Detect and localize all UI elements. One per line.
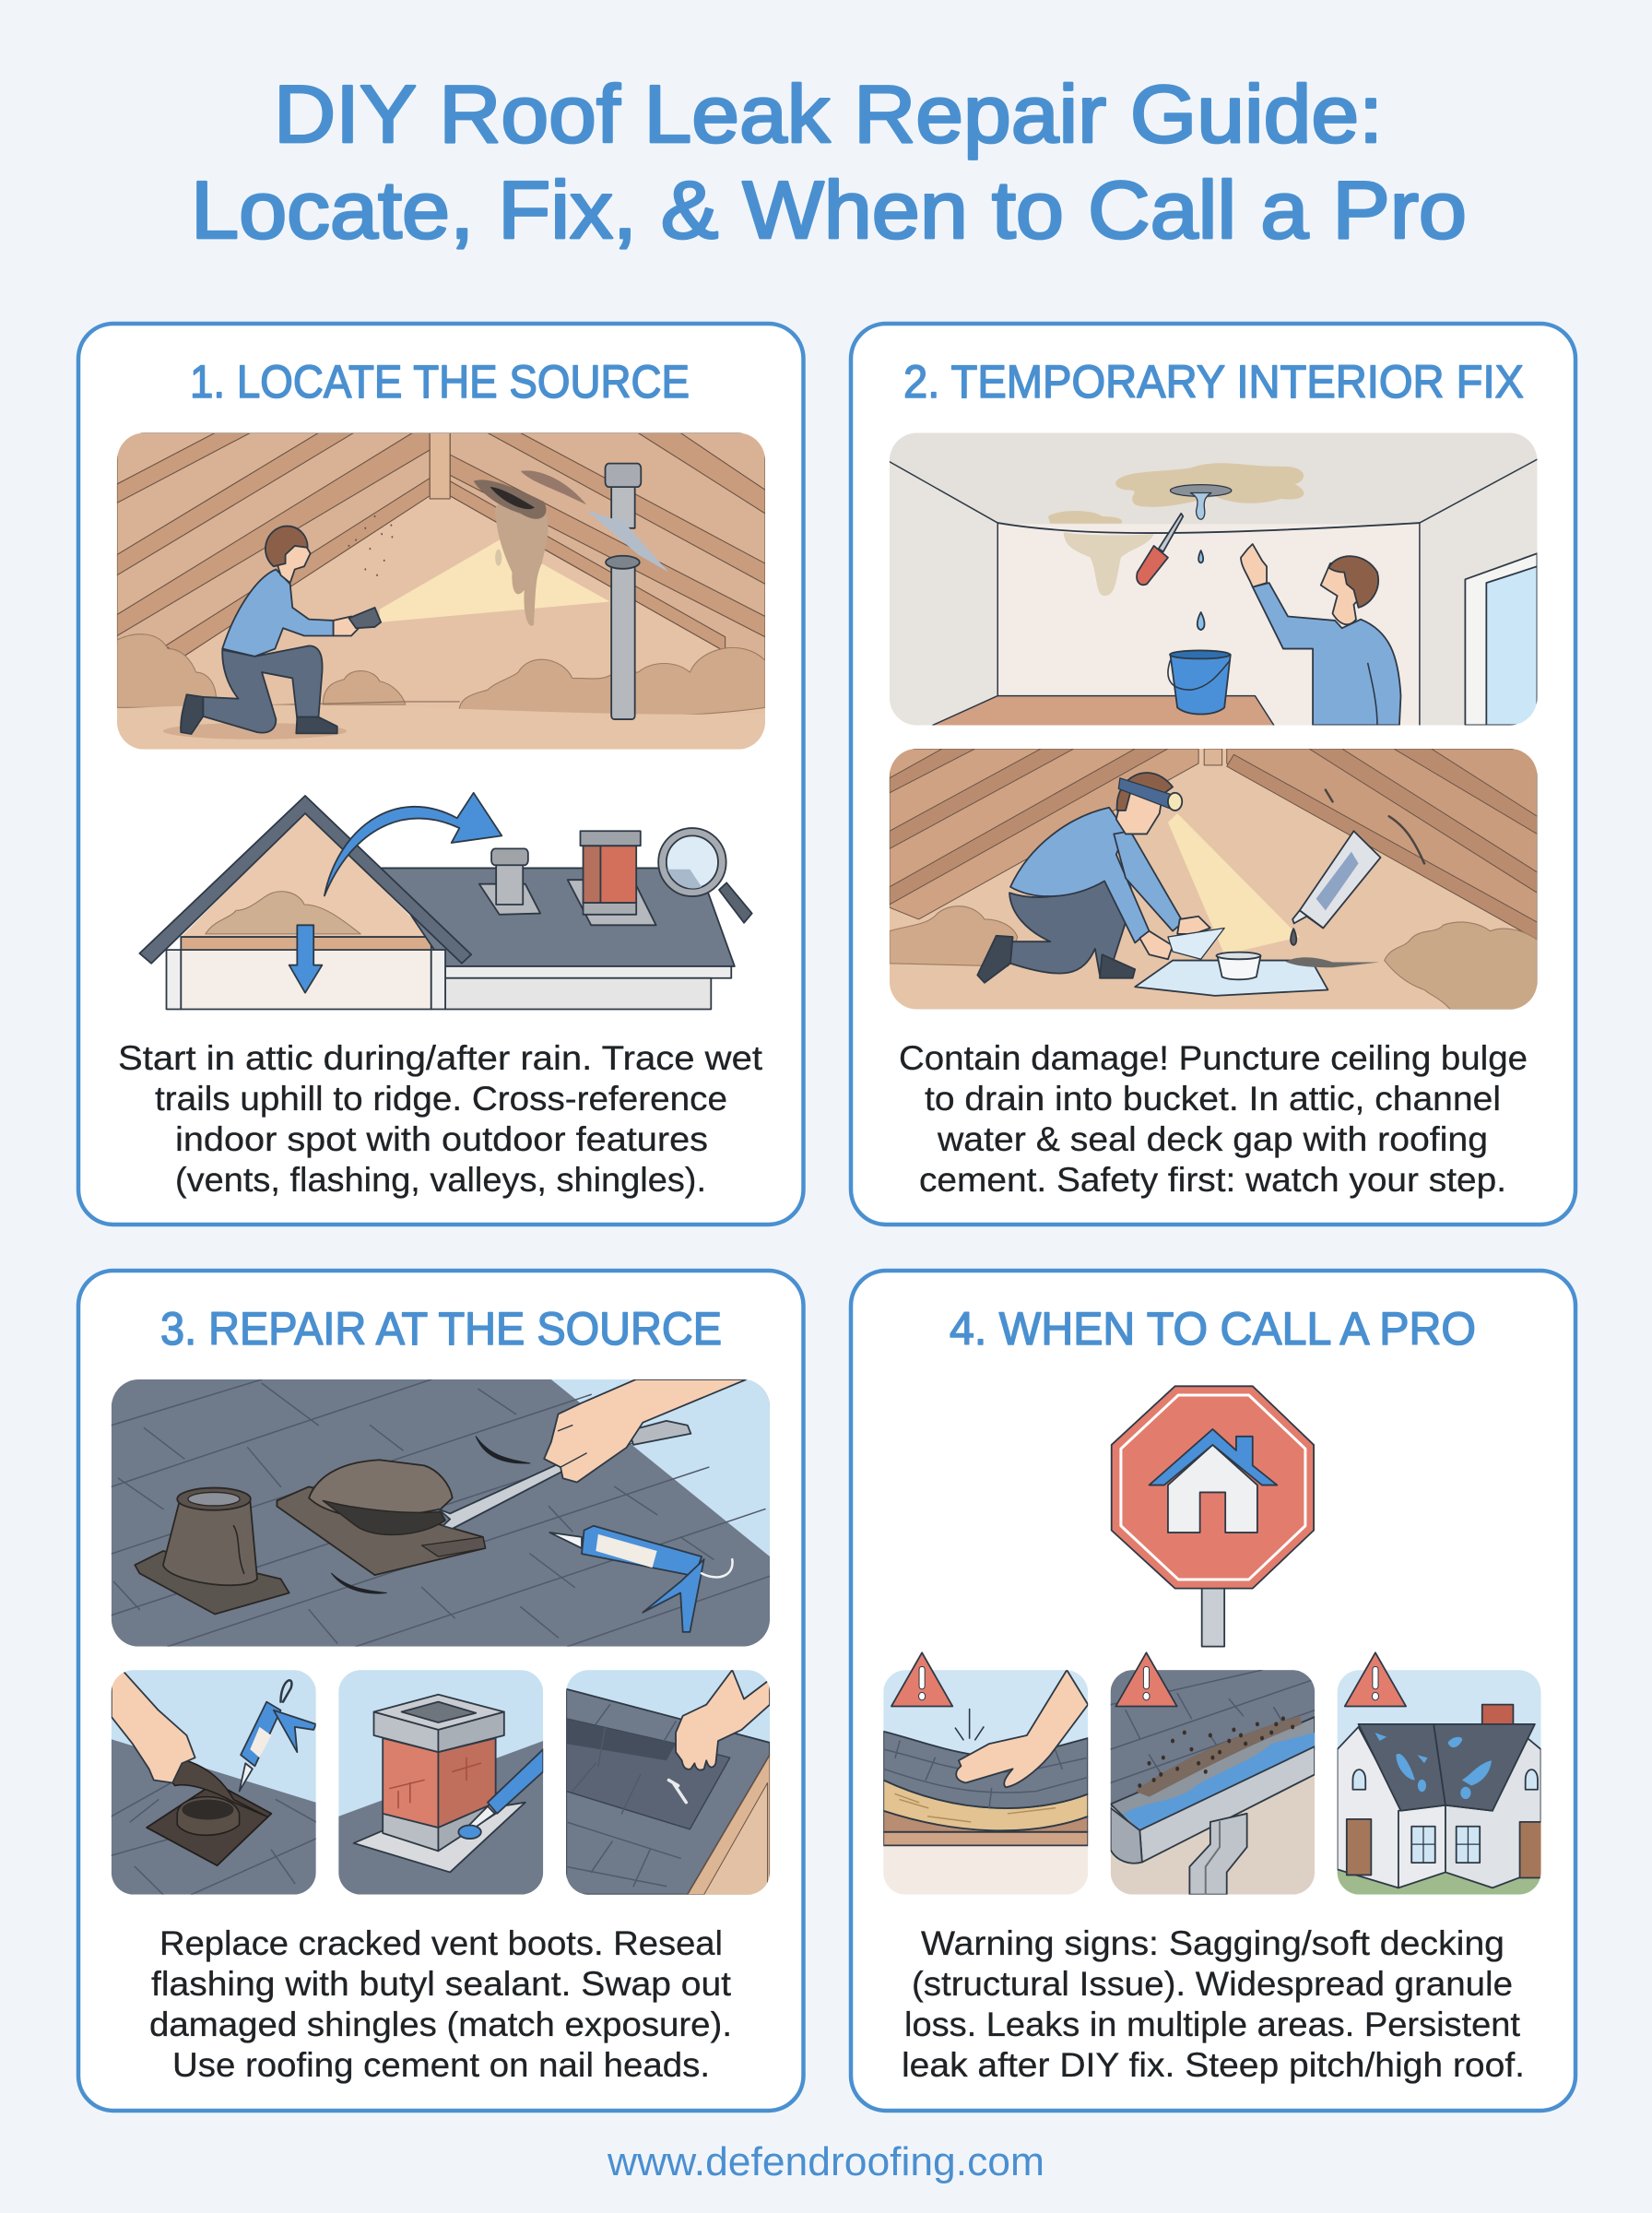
pry bar and hand xyxy=(438,1379,747,1529)
doors and windows xyxy=(1347,1769,1543,1877)
illustration: attic inspection with flashlight xyxy=(117,432,765,750)
ceiling bulge and drip xyxy=(1170,485,1232,519)
panel frame xyxy=(78,1271,804,2111)
flashlight beam xyxy=(380,540,610,622)
illustration: attic containment with sealant xyxy=(890,749,1537,1010)
illustration: octagonal warning sign with house xyxy=(1112,1386,1314,1647)
panel: 3 repair at the source xyxy=(78,1271,804,2111)
title: Locate, Fix, & When to Call a Pro xyxy=(191,164,1467,255)
illustration: roof with vent boot, vent cover, wrench and caulk gun xyxy=(112,1379,770,1647)
warning icons xyxy=(891,1652,1406,1706)
roof vent cover xyxy=(277,1460,485,1575)
vent pipe xyxy=(586,464,668,719)
water stain and drips xyxy=(474,470,586,626)
title: DIY Roof Leak Repair Guide: xyxy=(274,68,1383,160)
catch tub xyxy=(1216,953,1260,979)
sealant tool xyxy=(458,1749,543,1839)
body text: Warning signs: Sagging/soft decking xyxy=(921,1924,1504,1962)
downspout xyxy=(1189,1814,1247,1895)
body text: flashing with butyl sealant. Swap out xyxy=(151,1965,732,2003)
chimney xyxy=(1482,1705,1513,1745)
person reaching up xyxy=(1241,544,1400,725)
warning triangle 3 xyxy=(1345,1652,1406,1706)
illustration: room with ceiling bulge and bucket xyxy=(890,432,1537,725)
walls xyxy=(1338,1727,1403,1888)
bucket xyxy=(1168,650,1231,715)
panel frame xyxy=(851,1271,1575,2111)
body text: to drain into bucket. In attic, channel xyxy=(925,1080,1501,1118)
illustration: sagging decking xyxy=(883,1670,1088,1895)
leak spots xyxy=(1375,1733,1492,1799)
house icon xyxy=(1150,1429,1277,1533)
body text xyxy=(902,1924,1525,2084)
body text xyxy=(118,1039,763,1199)
window xyxy=(1465,553,1537,725)
sign post xyxy=(1202,1589,1224,1647)
gutter xyxy=(1111,1717,1315,1864)
person kneeling with flashlight xyxy=(181,527,381,734)
sealant tube xyxy=(1291,831,1381,945)
body text: (vents, flashing, valleys, shingles). xyxy=(175,1161,706,1199)
illustration: resealing chimney flashing xyxy=(338,1670,543,1895)
panel frame xyxy=(851,324,1575,1225)
illustration: granule loss in gutter xyxy=(1111,1670,1315,1895)
body text: trails uphill to ridge. Cross-reference xyxy=(155,1080,727,1118)
roof xyxy=(1359,1724,1446,1811)
panel: 4 when to call a pro xyxy=(851,1271,1575,2111)
body text xyxy=(899,1039,1528,1199)
warning triangle 1 xyxy=(891,1652,952,1706)
sealant smear xyxy=(1285,957,1380,967)
illustration: house with multiple leaks xyxy=(1338,1670,1543,1895)
ceiling stains xyxy=(1048,463,1304,596)
screwdriver xyxy=(1137,514,1183,585)
mould specks xyxy=(348,515,393,576)
panel: 2 temporary interior fix xyxy=(851,324,1575,1225)
chimney xyxy=(374,1695,504,1851)
body text: indoor spot with outdoor features xyxy=(175,1120,708,1158)
insulation clumps xyxy=(117,634,765,717)
body text: damaged shingles (match exposure). xyxy=(149,2006,732,2043)
body text xyxy=(149,1924,732,2084)
granules xyxy=(1135,1716,1302,1797)
floor line xyxy=(273,701,460,704)
chimney xyxy=(568,831,656,925)
body text: leak after DIY fix. Steep pitch/high roof. xyxy=(902,2046,1525,2084)
panel frame xyxy=(78,324,804,1225)
headlamp beam xyxy=(1168,813,1300,954)
caulk gun xyxy=(549,1526,733,1632)
insulation xyxy=(890,906,1537,1010)
tarp xyxy=(1135,961,1328,996)
heading: 1. LOCATE THE SOURCE xyxy=(190,356,690,408)
lower roof section xyxy=(380,868,735,1010)
body text: Contain damage! Puncture ceiling bulge xyxy=(899,1039,1528,1077)
heading: 4. WHEN TO CALL A PRO xyxy=(950,1303,1476,1355)
water drops xyxy=(1198,550,1205,630)
warning triangle 2 xyxy=(1115,1652,1177,1706)
illustration: roof cross-section with arrows xyxy=(139,793,752,1010)
body text: Start in attic during/after rain. Trace wet xyxy=(118,1039,763,1077)
illustration: resealing vent boot xyxy=(112,1670,316,1895)
body text: (structural Issue). Widespread granule xyxy=(912,1965,1513,2003)
heading: 2. TEMPORARY INTERIOR FIX xyxy=(903,356,1524,408)
title xyxy=(191,68,1467,255)
down arrow xyxy=(289,925,322,993)
illustration: replacing damaged shingle xyxy=(566,1670,770,1895)
cracked vent boot xyxy=(135,1488,289,1615)
magnifying glass xyxy=(658,828,752,923)
person kneeling with headlamp xyxy=(977,773,1224,983)
footer url: www.defendroofing.com xyxy=(607,2139,1044,2184)
body text: cement. Safety first: watch your step. xyxy=(919,1161,1506,1199)
curved arrow xyxy=(324,793,502,895)
caulk gun xyxy=(240,1680,316,1792)
nail xyxy=(668,1780,686,1803)
body text: Use roofing cement on nail heads. xyxy=(172,2046,710,2084)
body text: water & seal deck gap with roofing xyxy=(937,1120,1488,1158)
body text: loss. Leaks in multiple areas. Persistent xyxy=(904,2006,1521,2043)
heading: 3. REPAIR AT THE SOURCE xyxy=(160,1303,722,1355)
flashing collar xyxy=(147,1782,271,1865)
hand lifting shingle xyxy=(112,1671,266,1817)
hand on shingle xyxy=(676,1670,770,1770)
panel: 1 locate the source xyxy=(78,324,804,1225)
body text: Replace cracked vent boots. Reseal xyxy=(159,1924,723,1962)
attic gable xyxy=(167,812,431,1010)
roof vent xyxy=(479,848,540,915)
